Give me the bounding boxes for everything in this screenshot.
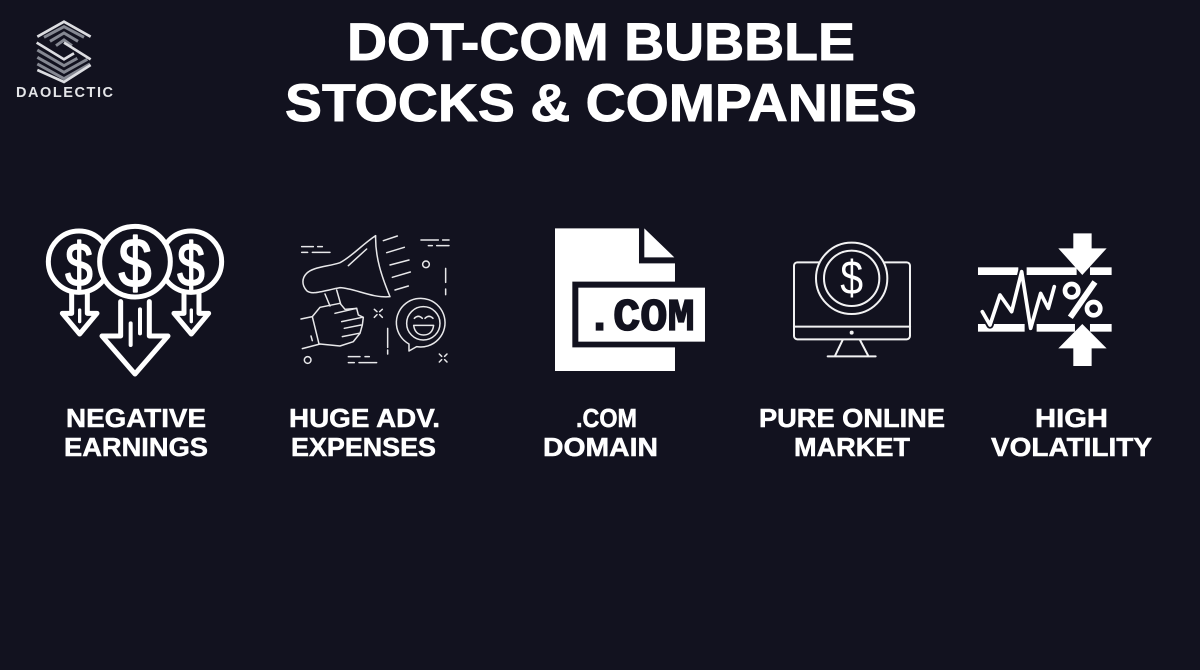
label: huge adv. expenses: HUGE ADV.	[289, 405, 440, 433]
icon: high volatility, squeezed chart with percent	[978, 233, 1112, 366]
icon: negative earnings, coins with down arrows	[48, 223, 222, 374]
icon: pure online market, monitor with dollar coin	[794, 243, 910, 356]
label: huge adv. expenses	[289, 405, 440, 462]
title: DOT-COM BUBBLE	[347, 13, 855, 72]
title: STOCKS & COMPANIES	[285, 74, 917, 133]
icon: .com domain file	[555, 228, 705, 371]
dashes	[302, 240, 449, 363]
label: high volatility: HIGH	[1035, 405, 1108, 433]
icon: negative earnings, coins with down arrows: $	[177, 230, 205, 299]
label: .com domain	[543, 405, 658, 462]
label: high volatility	[991, 405, 1152, 462]
megaphone	[303, 236, 390, 297]
label: .com domain: .COM	[576, 405, 637, 433]
logo: Daolectic	[16, 22, 114, 101]
label: pure online market	[759, 405, 945, 462]
label: negative earnings: EARNINGS	[64, 434, 208, 462]
icon: negative earnings, coins with down arrows: $	[118, 223, 152, 302]
logo wordmark: DAOLECTIC	[16, 85, 114, 101]
label: huge adv. expenses: EXPENSES	[291, 434, 436, 462]
label: negative earnings: NEGATIVE	[66, 405, 206, 433]
icon: logo hexagon	[37, 22, 91, 82]
label: negative earnings	[64, 405, 208, 462]
smiley speech bubble	[396, 298, 445, 351]
label: high volatility: VOLATILITY	[991, 434, 1152, 462]
icon: negative earnings, coins with down arrows: $	[65, 230, 93, 299]
icon: .com domain file: .COM	[586, 292, 695, 344]
sound rays	[383, 236, 410, 290]
label: .com domain: DOMAIN	[543, 434, 658, 462]
label: pure online market: MARKET	[794, 434, 910, 462]
hand	[301, 303, 363, 349]
icon: huge advertising, megaphone in hand	[301, 236, 449, 363]
title	[285, 13, 917, 133]
icon: pure online market, monitor with dollar coin: $	[840, 250, 863, 305]
label: pure online market: PURE ONLINE	[759, 405, 945, 433]
